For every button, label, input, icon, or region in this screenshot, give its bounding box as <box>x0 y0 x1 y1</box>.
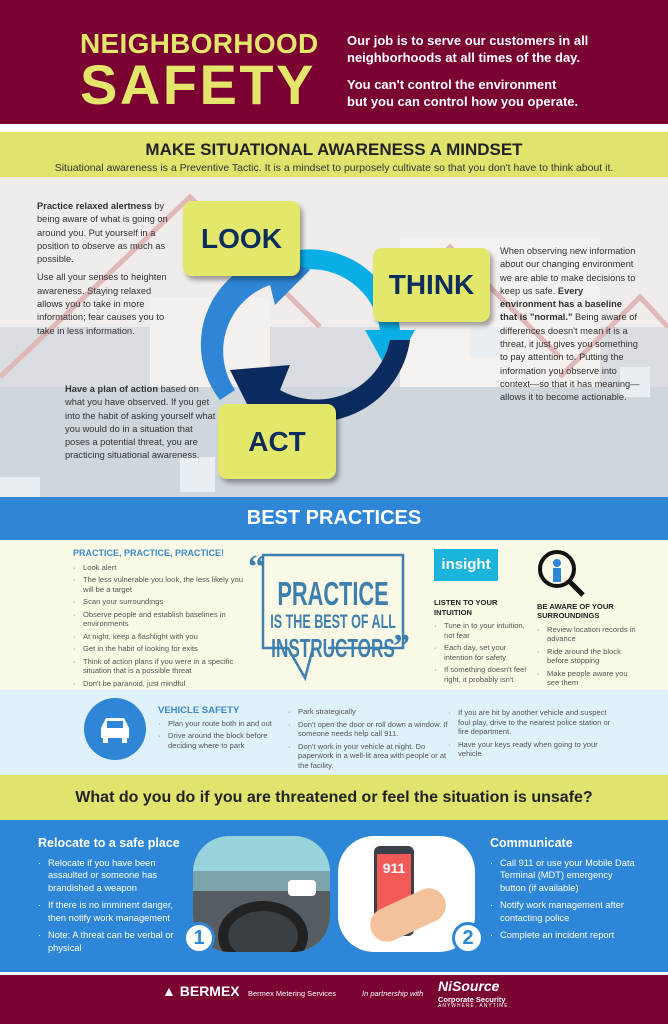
cycle arrows <box>200 249 415 420</box>
best practices band <box>0 497 668 540</box>
icon: insight <box>434 549 498 581</box>
vehicle list 1: Plan your route both in and out <box>168 718 272 728</box>
vehicle list 2: Park strategically <box>298 707 356 716</box>
title: SAFETY <box>80 53 316 116</box>
practice list: Don't be paranoid, just mindful <box>83 678 185 688</box>
logo: nisource: ANYWHERE. ANYTIME. <box>438 1002 511 1008</box>
communicate text: Notify work management after contacting police <box>500 900 624 922</box>
text: relaxed alertness: Practice relaxed alertness by being aware of what is going on around you. Put yourself in a position to observe as much as possible. <box>37 201 168 264</box>
intuition column: Tune in to your intuition, not fear <box>444 621 525 640</box>
card: LOOK <box>183 201 300 276</box>
text: relaxed alertness <box>37 201 168 336</box>
question band <box>0 775 668 820</box>
communicate text <box>490 836 635 940</box>
header text: but you can control how you operate. <box>347 94 578 109</box>
text: observing: When observing new information about our changing environment we are able to make decisions to keep us safe. Every environment has a baseline that is "normal." Being aware of differences doesn't mean it is a threat, it just gives you something to pay attention to. Putting the information you observe into context—so that it has meaning—allows it to become actionable. <box>500 246 640 402</box>
practice list: Observe people and establish baselines in environments <box>83 610 226 628</box>
vehicle list 1: VEHICLE SAFETY <box>158 705 239 716</box>
vehicle list 2 <box>288 707 448 770</box>
practice list: Think of action plans if you were in a specific situation that is a possible threat <box>83 656 233 675</box>
communicate text: Complete an incident report <box>500 930 614 940</box>
vehicle list 3: If you are hit by another vehicle and suspect foul play, drive to the nearest police station or fire department. <box>458 708 610 736</box>
logo: bermex: ▲ BERMEX <box>162 983 240 999</box>
intuition column: If something doesn't feel right, it probably isn't <box>444 665 526 684</box>
vehicle list 1 <box>158 705 272 750</box>
header text: Our job is to serve our customers in all neighborhoods at all times of the day. <box>347 33 588 65</box>
panel: practices <box>0 540 668 690</box>
surroundings column: Review location records in advance <box>547 624 636 643</box>
icon: car <box>84 698 146 760</box>
relocate text: Relocate if you have been assaulted or someone has brandished a weapon <box>48 858 157 892</box>
card: THINK <box>373 248 490 322</box>
illustration: driving <box>193 836 330 952</box>
text: plan of action: Have a plan of action based on what you have observed. If you get into the habit of asking yourself what you would do in a situation that poses a potential threat, you are practicing situational awareness. <box>65 384 215 460</box>
quote bubble: INSTRUCTORS <box>271 633 395 663</box>
footer <box>0 975 668 1024</box>
practice list <box>73 548 243 688</box>
quote bubble: “ <box>248 549 265 586</box>
footer: In partnership with <box>362 989 423 998</box>
panel: response <box>0 820 668 972</box>
relocate text: Relocate to a safe place <box>38 836 180 850</box>
vehicle list 3: Have your keys ready when going to your vehicle <box>458 740 598 758</box>
heading: MAKE SITUATIONAL AWARENESS A MINDSET <box>145 140 523 159</box>
subtitle: Situational awareness is a Preventive Tactic. It is a mindset to purposely cultivate so that you don't have to think about it. <box>55 162 613 174</box>
quote bubble <box>248 549 410 682</box>
communicate text: Call 911 or use your Mobile Data Terminal (MDT) emergency button (if available) <box>500 858 635 892</box>
practice list: At night, keep a flashlight with you <box>83 632 198 640</box>
surroundings column: BE AWARE OF YOUR SURROUNDINGS <box>537 602 614 620</box>
header text <box>347 33 588 109</box>
practice list: Get in the habit of looking for exits <box>83 644 198 653</box>
icon: insight: insight <box>441 556 491 573</box>
yellow heading band <box>0 132 668 177</box>
badge 2 <box>452 922 484 954</box>
surroundings column: Make people aware you see them <box>547 668 628 687</box>
intuition column: LISTEN TO YOUR INTUITION <box>434 598 497 616</box>
intuition column: Each day, set your intention for safety <box>444 643 506 662</box>
illustration: phone <box>338 836 475 952</box>
text: relaxed alertness: Use all your senses to heighten awareness. Staying relaxed allows you to take in more information; fear causes you to take in less information. <box>37 272 167 336</box>
panel: houses background <box>0 177 668 497</box>
quote bubble: ” <box>393 628 410 665</box>
vehicle list 2: Don't open the door or roll down a window. If someone needs help call 911. <box>298 720 448 738</box>
relocate text <box>38 836 180 953</box>
card: ACT <box>218 404 336 479</box>
practice list: The less vulnerable you look, the less likely you will be a target <box>83 575 243 594</box>
illustration: phone: 911 <box>383 860 405 876</box>
question band: What do you do if you are threatened or feel the situation is unsafe? <box>75 789 593 806</box>
header text: You can't control the environment <box>347 77 556 92</box>
vehicle list 3 <box>448 708 610 758</box>
surroundings column: Have an exit strategy <box>547 690 618 700</box>
vehicle list 1: Drive around the block before deciding where to park <box>168 731 268 750</box>
surroundings column: Ride around the block before stopping <box>547 646 621 665</box>
panel: vehicle safety <box>0 690 668 775</box>
badge 2: 2 <box>462 927 474 949</box>
header band <box>0 0 668 124</box>
communicate text: Communicate <box>490 836 573 850</box>
surroundings column <box>537 550 636 700</box>
badge 1: 1 <box>193 927 205 949</box>
title: NEIGHBORHOOD <box>80 28 318 59</box>
logo: nisource: Corporate Security <box>438 995 506 1004</box>
practice list: Look alert <box>83 562 116 572</box>
relocate text: Note: A threat can be verbal or physical <box>48 930 174 952</box>
card: THINK: THINK <box>389 269 474 300</box>
practice list: PRACTICE, PRACTICE, PRACTICE! <box>73 548 224 558</box>
intuition column <box>434 549 526 684</box>
relocate text: If there is no imminent danger, then notify work management <box>48 900 173 922</box>
card: ACT: ACT <box>248 426 306 456</box>
practice list: Scan your surroundings <box>83 597 163 606</box>
icon: magnifier <box>538 550 585 597</box>
card: LOOK: LOOK <box>201 222 282 254</box>
logo: nisource: NiSource <box>438 978 499 994</box>
footer: Bermex Metering Services <box>248 989 336 998</box>
best practices band: BEST PRACTICES <box>247 507 421 529</box>
quote bubble: PRACTICE <box>277 575 389 612</box>
vehicle list 2: Don't work in your vehicle at night. Do paperwork in a well-lit area with people or at the facility. <box>298 742 446 770</box>
quote bubble: IS THE BEST OF ALL <box>270 612 396 633</box>
badge 1 <box>183 922 215 954</box>
logo: nisource <box>438 978 511 1008</box>
